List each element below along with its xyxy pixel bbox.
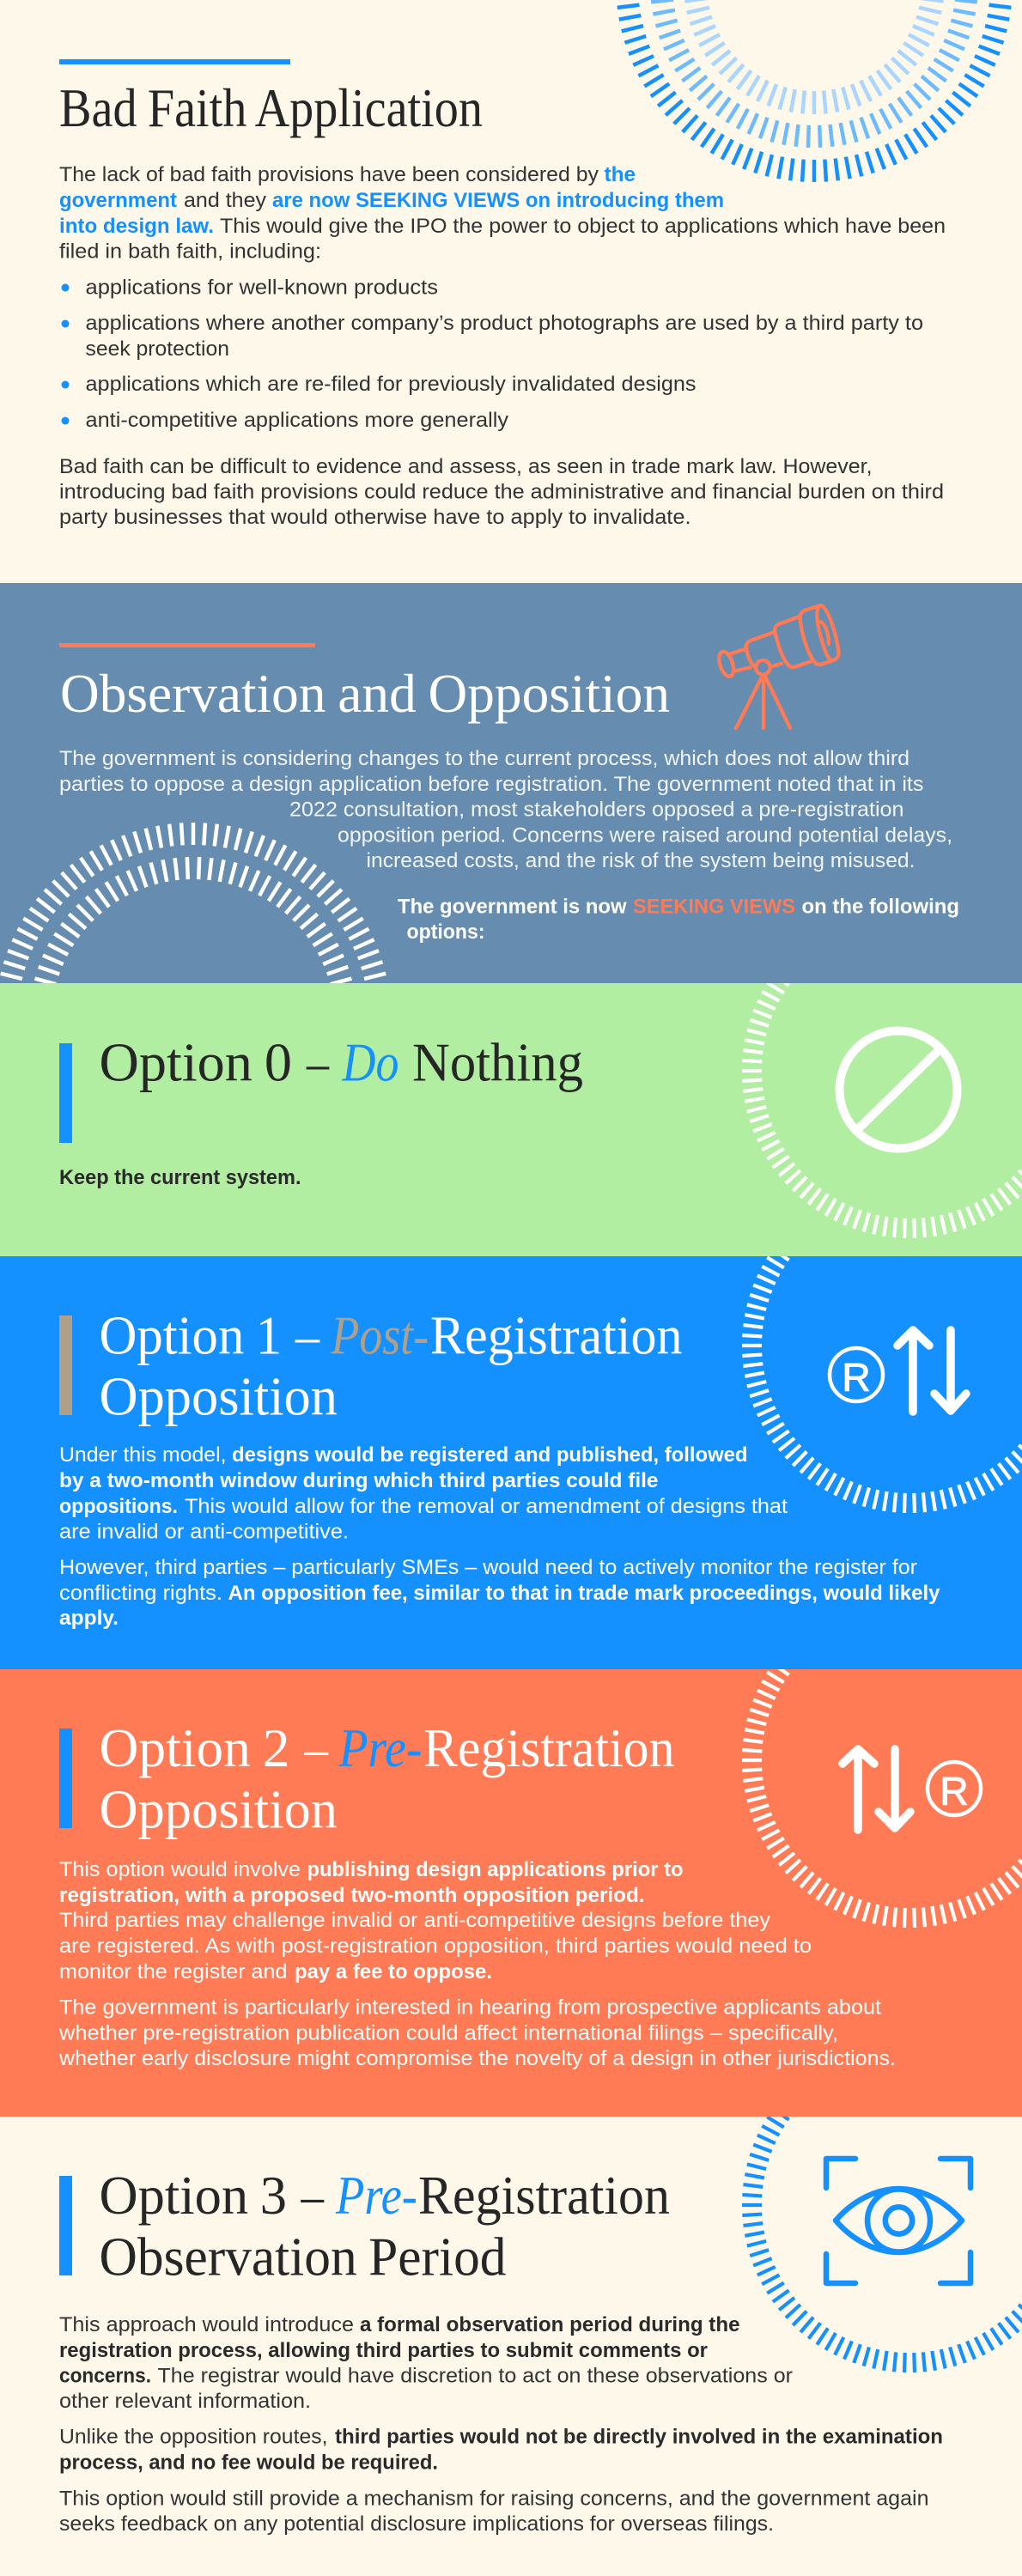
heading: Option 2: –	[304, 1718, 328, 1778]
body text: This approach would introduce	[59, 2313, 354, 2336]
heading: Option 3: –	[301, 2166, 324, 2226]
decorative ring	[742, 2117, 1022, 2372]
heading: Option 1: Option 1	[100, 1305, 282, 1365]
heading: Option 3	[100, 2166, 670, 2287]
intro paragraph: This would give the IPO the power to object to applications which have been	[220, 215, 946, 238]
heading: Bad Faith Application: Bad Faith Application	[59, 78, 483, 138]
heading: Option 1: Registration	[430, 1305, 682, 1365]
body text: a formal observation period during the	[360, 2313, 740, 2336]
body text: concerns.	[59, 2365, 151, 2387]
body text: pay a fee to oppose.	[295, 1960, 492, 1984]
body paragraph: 2022 consultation, most stakeholders opposed a pre-registration	[289, 799, 903, 821]
accent rule	[59, 59, 290, 64]
body text: monitor the register and	[59, 1960, 287, 1984]
heading: Option 0: –	[306, 1032, 329, 1092]
seeking views statement: The government is now	[398, 895, 627, 919]
intro paragraph: government	[59, 189, 177, 212]
body text: seeks feedback on any potential disclosure implications for overseas filings.	[59, 2512, 774, 2536]
heading: Option 0	[100, 1032, 583, 1092]
body text: by a two-month window during which third parties could file	[59, 1469, 658, 1492]
body text: whether pre-registration publication could affect international filings – specifically,	[58, 2021, 838, 2045]
panel: bad faith application	[59, 0, 1012, 528]
body text: Third parties may challenge invalid or anti-competitive designs before they	[59, 1909, 770, 1932]
closing paragraph: Bad faith can be difficult to evidence and assess, as seen in trade mark law. However,	[59, 455, 873, 478]
heading: Option 0: Do	[342, 1032, 398, 1092]
closing paragraph	[59, 455, 944, 529]
seeking views statement	[398, 895, 959, 944]
seeking views statement: options:	[407, 920, 484, 944]
body paragraph	[59, 747, 952, 872]
icon: telescope	[716, 605, 838, 728]
panel: observation and opposition	[0, 583, 1022, 983]
closing paragraph: party businesses that would otherwise have to apply to invalidate.	[59, 506, 691, 529]
body text: are invalid or anti-competitive.	[59, 1520, 349, 1544]
panel: option 2	[0, 1669, 1022, 2117]
icon: registered mark with arrows	[830, 1330, 966, 1412]
bullet list: applications which are re-filed for previously invalidated designs	[86, 373, 696, 396]
bullet list: applications where another company’s product photographs are used by a third party to	[86, 312, 923, 335]
icon: arrows with registered mark: R	[940, 1769, 969, 1814]
body text: registration, with a proposed two-month opposition period.	[59, 1884, 644, 1907]
body text: oppositions.	[59, 1495, 178, 1518]
intro paragraph: the	[605, 163, 636, 186]
heading: Option 3: Option 3	[100, 2166, 287, 2226]
body text: Keep the current system.	[59, 1166, 301, 1189]
body text: other relevant information.	[59, 2390, 311, 2413]
accent bar	[59, 2176, 72, 2275]
body paragraph: increased costs, and the risk of the system being misused.	[366, 849, 916, 872]
panel: option 1	[0, 1256, 1022, 1669]
body text: The government is particularly interested in hearing from prospective applicants about	[59, 1996, 881, 2020]
seeking views statement: SEEKING VIEWS	[633, 895, 795, 919]
bullet list: anti-competitive applications more generally	[86, 409, 508, 432]
body paragraph: The government is considering changes to the current process, which does not allow third	[59, 747, 909, 770]
heading: Option 3: Registration	[418, 2166, 670, 2226]
heading: Option 0: Nothing	[412, 1032, 583, 1092]
heading: Option 2	[100, 1718, 675, 1839]
heading: Option 1	[100, 1305, 682, 1427]
body text: conflicting rights.	[59, 1582, 222, 1605]
body text: This would allow for the removal or amendment of designs that	[185, 1495, 788, 1518]
intro paragraph	[59, 163, 946, 263]
heading: Option 2: Opposition	[100, 1779, 338, 1839]
decorative ring	[742, 983, 1022, 1238]
seeking views statement: on the following	[802, 895, 959, 919]
decorative ring	[742, 1256, 1022, 1513]
accent bar	[59, 1043, 72, 1143]
body text	[59, 2313, 943, 2536]
body text: third parties would not be directly involved in the examination	[335, 2425, 943, 2449]
accent bar	[59, 1728, 72, 1828]
bullet list: seek protection	[86, 337, 229, 361]
body text: Under this model,	[59, 1443, 227, 1467]
bullet list: applications for well-known products	[86, 276, 438, 299]
body text	[59, 1443, 940, 1630]
body text: The registrar would have discretion to act on these observations or	[158, 2365, 793, 2387]
heading: Option 1: Post-	[331, 1305, 429, 1365]
bullet list	[62, 276, 923, 432]
body text	[58, 1858, 896, 2070]
accent rule	[59, 643, 315, 647]
body text: An opposition fee, similar to that in trade mark proceedings, would likely	[228, 1582, 940, 1605]
heading: Option 1: Opposition	[100, 1367, 338, 1427]
icon: registered mark with arrows: R	[842, 1355, 871, 1400]
icon: eye in focus brackets	[826, 2159, 970, 2283]
body text: are registered. As with post-registration opposition, third parties would need to	[59, 1935, 812, 1958]
panel: option 0	[0, 983, 1022, 1256]
body paragraph: parties to oppose a design application before registration. The government noted that in its	[59, 773, 924, 796]
heading: Option 3: Pre-	[335, 2166, 417, 2226]
closing paragraph: introducing bad faith provisions could reduce the administrative and financial burden on third	[59, 481, 944, 503]
icon: prohibited sign	[840, 1030, 957, 1149]
decorative white rings	[0, 823, 386, 983]
body text: This option would still provide a mechanism for raising concerns, and the government again	[59, 2487, 929, 2511]
intro paragraph: and they	[184, 189, 266, 212]
body text: registration process, allowing third parties to submit comments or	[59, 2339, 708, 2362]
heading: Option 0: Option 0	[100, 1032, 292, 1092]
heading: Option 3: Observation Period	[100, 2227, 507, 2287]
heading: Observation and Opposition: Observation and Opposition	[60, 664, 670, 724]
body text: apply.	[59, 1607, 119, 1630]
body text: designs would be registered and published, followed	[232, 1443, 747, 1467]
body paragraph: opposition period. Concerns were raised around potential delays,	[338, 824, 952, 847]
decorative ring	[742, 1669, 1022, 1928]
decorative concentric blue rings	[617, 0, 1012, 182]
body text: Unlike the opposition routes,	[59, 2425, 328, 2449]
body text: process, and no fee would be required.	[59, 2451, 438, 2475]
icon: arrows with registered mark	[843, 1749, 981, 1830]
intro paragraph: into design law.	[59, 215, 214, 238]
heading: Option 1: –	[295, 1305, 319, 1365]
body text: This option would involve	[59, 1858, 301, 1881]
intro paragraph: are now SEEKING VIEWS on introducing them	[272, 189, 724, 212]
intro paragraph: The lack of bad faith provisions have been considered by	[59, 163, 599, 186]
accent bar	[59, 1315, 72, 1415]
heading: Option 2: Pre-	[338, 1718, 423, 1778]
heading: Option 2: Registration	[423, 1718, 675, 1778]
body text: whether early disclosure might compromise the novelty of a design in other jurisdictions.	[58, 2047, 896, 2070]
body text: However, third parties – particularly SMEs – would need to actively monitor the register for	[59, 1556, 917, 1579]
panel: option 3	[59, 2117, 1022, 2535]
heading: Option 2: Option 2	[100, 1718, 290, 1778]
intro paragraph: filed in bath faith, including:	[59, 240, 321, 263]
body text: publishing design applications prior to	[307, 1858, 684, 1881]
